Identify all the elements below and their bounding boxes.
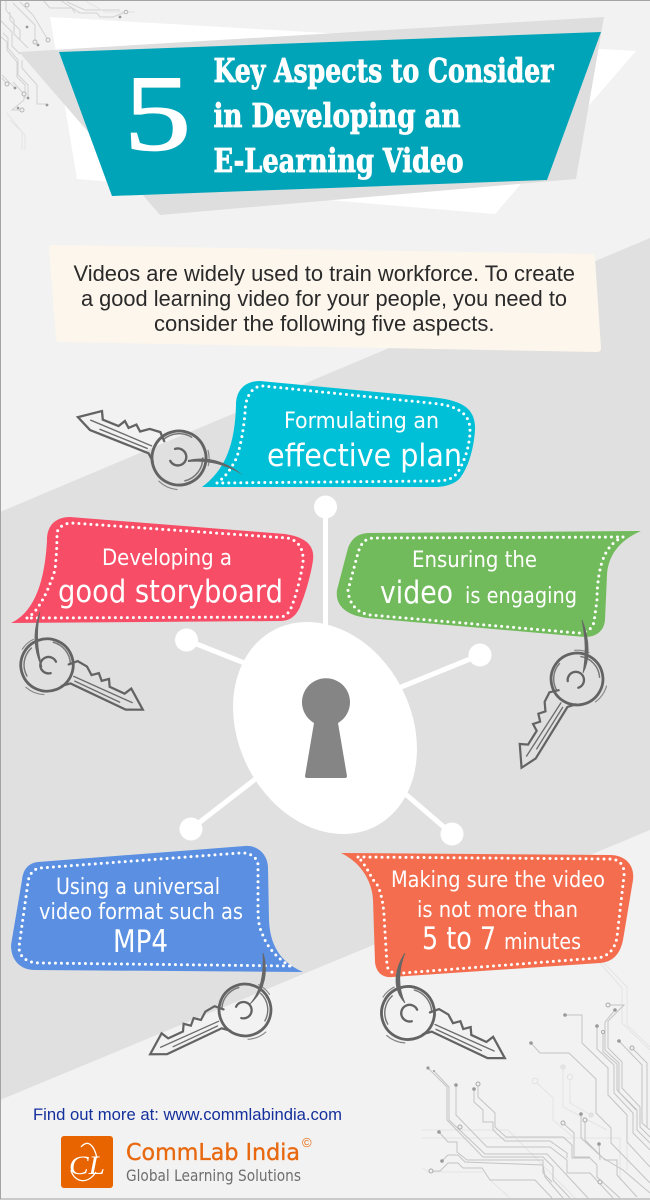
dotted outline	[358, 857, 624, 973]
aspect 5: 5 to 7 minutes	[341, 853, 633, 1086]
dotted outline	[217, 386, 470, 483]
banner grey backing	[19, 17, 604, 215]
bubble	[202, 381, 475, 487]
intro background	[49, 245, 601, 352]
footer link text: Find out more at: www.commlabindia.com	[33, 1105, 342, 1124]
bubble text: Using a universal	[56, 875, 220, 900]
title text: E-Learning Video	[214, 141, 464, 180]
logo tagline: Global Learning Solutions	[126, 1166, 301, 1185]
dotted outline	[19, 853, 290, 966]
bubble	[337, 531, 641, 637]
intro panel	[49, 245, 601, 352]
intro text	[74, 261, 575, 336]
bubble text: is not more than	[417, 898, 578, 923]
background diagonal band	[0, 238, 650, 1100]
bubble text	[39, 875, 243, 960]
aspect 3: video is engaging	[337, 531, 641, 784]
connector spokes	[186, 507, 480, 834]
bubble text: Formulating an	[284, 409, 439, 434]
title banner	[19, 17, 636, 215]
aspect 1: effective plan	[66, 381, 475, 498]
bubble text: Developing a	[102, 546, 232, 571]
central lock hub	[175, 496, 492, 866]
logo mark: CL	[69, 1151, 105, 1180]
bubble text: good storyboard	[58, 574, 283, 610]
bubble text: minutes	[504, 930, 581, 955]
title text: Key Aspects to Consider	[214, 51, 554, 90]
bubble	[11, 846, 303, 972]
spoke end nodes	[175, 496, 492, 846]
circuit decoration: top left	[0, 0, 135, 150]
dotted outline	[348, 537, 623, 633]
bubble text: 5 to 7	[422, 921, 496, 957]
bubble text: video	[380, 575, 453, 611]
title text: in Developing an	[214, 96, 460, 135]
circuit decoration: bottom right	[422, 963, 650, 1198]
bubble text	[380, 548, 577, 611]
icon: key	[139, 953, 284, 1081]
bubble text	[267, 409, 462, 474]
banner white backing	[50, 17, 636, 214]
banner teal face	[59, 32, 601, 196]
bubble text	[391, 868, 605, 957]
intro text: a good learning video for your people, you need to	[81, 286, 567, 311]
intro text: consider the following five aspects.	[154, 311, 494, 336]
logo	[61, 1135, 312, 1188]
icon: key	[368, 953, 516, 1086]
bubble text: Making sure the video	[391, 868, 605, 893]
icon: key	[500, 620, 618, 784]
white oval	[198, 590, 452, 866]
bubble text: MP4	[113, 924, 168, 960]
icon: keyhole	[302, 678, 350, 778]
bubble text: effective plan	[267, 438, 462, 474]
logo name: CommLab India	[126, 1140, 300, 1166]
icon: key	[66, 392, 243, 498]
aspect 4: MP4 format	[11, 846, 303, 1081]
icon: key	[8, 612, 154, 737]
bubble text	[58, 546, 283, 610]
logo mark	[61, 1136, 113, 1188]
bubble text: Ensuring the	[412, 548, 537, 573]
bubble	[341, 853, 633, 977]
aspect 2: good storyboard	[8, 517, 313, 737]
title text	[214, 51, 554, 180]
intro text: Videos are widely used to train workforce. To create	[74, 261, 575, 286]
bubble	[11, 517, 313, 623]
bubble text: video format such as	[39, 900, 243, 925]
dotted outline	[27, 523, 303, 618]
title numeral: 5	[124, 54, 191, 174]
copyright mark: ©	[302, 1135, 312, 1150]
bubble text: is engaging	[465, 584, 577, 609]
